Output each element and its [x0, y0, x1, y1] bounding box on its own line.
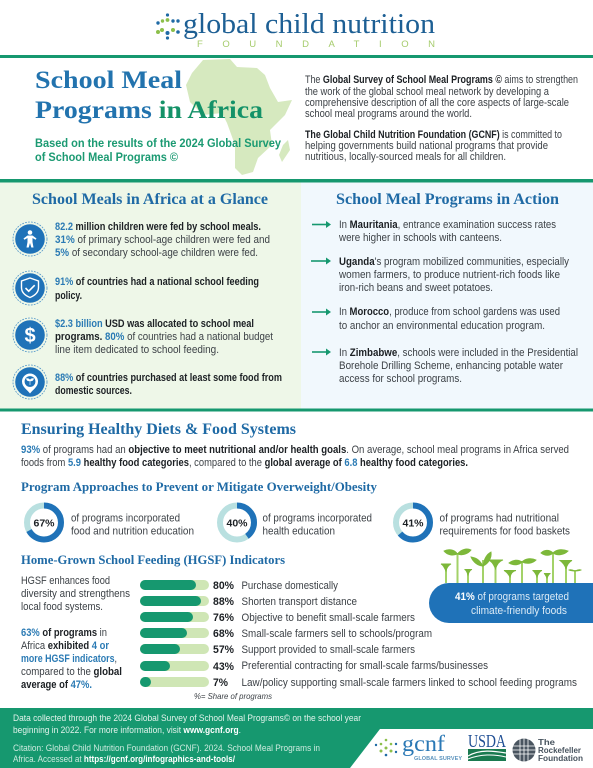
- text block: HGSF description: more HGSF indicators,: [21, 653, 117, 665]
- bar chart: 7%: [213, 677, 228, 689]
- text block: country examples: Borehole Drilling Scheme, enhancing potable water: [339, 360, 563, 372]
- donut label: [262, 512, 372, 538]
- donut: 41%: 41%: [402, 518, 424, 530]
- icon: shield: [13, 271, 47, 305]
- donut label: food and nutrition education: [71, 526, 194, 538]
- logo foundation: FOUNDATION: [197, 39, 435, 50]
- text block: key facts: 91% of countries had a national school feeding: [55, 276, 259, 288]
- text block: summary: foods from 5.9 healthy food categories, compared to the global average of 6.8 healthy food categories.: [21, 457, 468, 469]
- subtitle: of School Meal Programs ©: [35, 150, 178, 164]
- title: [35, 65, 263, 124]
- text block: HGSF description: [21, 575, 130, 691]
- footer text: [13, 713, 361, 764]
- logo wordmark: global child nutrition: [183, 9, 435, 40]
- text block: key facts: 82.2 million children were fed by school meals.: [55, 221, 261, 233]
- text block: country examples: Uganda's program mobilized communities, especially: [339, 256, 570, 268]
- donut label: of programs had nutritional: [440, 512, 559, 524]
- text block: country examples: to anchor an environmental education program.: [339, 320, 545, 332]
- bar chart: Law/policy supporting small-scale farmers linked to school feeding programs: [242, 677, 577, 689]
- text block: key facts: policy.: [55, 290, 82, 302]
- bar chart: Support provided to small-scale farmers: [242, 644, 415, 656]
- icon: dollar: $: [24, 325, 36, 347]
- chart note: %= Share of programs: [194, 691, 273, 701]
- icon: dollar: [13, 318, 47, 352]
- icon: Africa map: [186, 59, 292, 175]
- text block: HGSF description: compared to the global: [21, 666, 122, 678]
- logo: gcnf: gcnf: [402, 731, 445, 756]
- text block: summary: [21, 444, 569, 469]
- heading: Home-Grown School Feeding (HGSF) Indicators: [21, 553, 285, 567]
- logo: gcnf: [375, 731, 462, 762]
- text block: country examples: access for school programs.: [339, 373, 462, 385]
- donut: 40%: 40%: [226, 518, 248, 530]
- heading: Ensuring Healthy Diets & Food Systems: [21, 421, 296, 438]
- text block: key facts: domestic sources.: [55, 385, 132, 397]
- subheading: Program Approaches to Prevent or Mitigate Overweight/Obesity: [21, 480, 378, 494]
- title: Programs in Africa: [35, 95, 263, 124]
- icon: child: [13, 222, 47, 256]
- title: School Meal: [35, 65, 182, 94]
- text block: key facts: 5% of secondary school-age children were fed.: [55, 247, 258, 259]
- text block: key facts: 88% of countries purchased at least some food from: [55, 372, 282, 384]
- text block: country examples: iron-rich beans and sweet potatoes.: [339, 282, 493, 294]
- bar chart: Objective to benefit small-scale farmers: [242, 612, 415, 624]
- callout: climate-friendly foods: 41% of programs targeted: [455, 591, 569, 603]
- logo: USDA: USDA: [468, 731, 506, 751]
- logo panel: [350, 729, 593, 768]
- panel: intro: [35, 59, 578, 175]
- intro text: The Global Child Nutrition Foundation (GCNF) is committed to: [305, 129, 562, 141]
- text block: key facts: programs. 80% of countries had a national budget: [55, 331, 273, 343]
- bar chart: 88%: [213, 596, 234, 608]
- bar chart: Preferential contracting for small-scale farms/businesses: [242, 660, 488, 672]
- intro text: [305, 74, 578, 163]
- intro text: the work of the global school meal network by developing a: [305, 86, 549, 98]
- bar chart: Shorten transport distance: [242, 596, 357, 608]
- bar chart: 43%: [213, 661, 234, 673]
- panel: home-grown school feeding: [21, 549, 593, 701]
- donut label: requirements for food baskets: [440, 526, 570, 538]
- intro text: helping governments build national programs that provide: [305, 140, 548, 152]
- subtitle: Based on the results of the 2024 Global Survey: [35, 136, 281, 150]
- bar chart: Purchase domestically: [242, 580, 339, 592]
- callout: climate-friendly foods: climate-friendly foods: [471, 605, 567, 617]
- donut: 67%: 67%: [33, 518, 55, 530]
- text block: HGSF description: diversity and strengthens: [21, 588, 130, 600]
- heading: School Meals in Africa at a Glance: [32, 191, 268, 208]
- callout: climate-friendly foods: [429, 583, 593, 623]
- divider lines: [0, 55, 593, 182]
- bar chart: [140, 580, 577, 701]
- bar chart: 80%: [213, 580, 234, 592]
- logo: Rockefeller Foundation: The: [538, 738, 556, 747]
- footer text: Africa. Accessed at https://gcnf.org/infographics-and-tools/: [13, 754, 235, 764]
- panel: healthy diets and food systems: [21, 421, 570, 540]
- donut: 41%: [396, 506, 430, 540]
- subtitle: [35, 136, 281, 164]
- text block: country examples: In Zimbabwe, schools were included in the Presidential: [339, 347, 578, 359]
- header logo: [156, 9, 435, 50]
- logo: USDA: [468, 731, 506, 761]
- donut label: [71, 512, 194, 538]
- bar chart: 68%: [213, 628, 234, 640]
- donut: 40%: [220, 506, 254, 540]
- icon: food pin: [13, 365, 47, 399]
- donut label: health education: [262, 526, 335, 538]
- footer text: Data collected through the 2024 Global Survey of School Meal Programs© on the school year: [13, 713, 361, 723]
- text block: HGSF description: average of 47%.: [21, 679, 92, 691]
- bar chart: 57%: [213, 644, 234, 656]
- panel: school meal programs in action: [301, 182, 593, 408]
- text block: key facts: $2.3 billion USD was allocated to school meal: [55, 318, 254, 330]
- donut label: [440, 512, 570, 538]
- donut label: of programs incorporated: [71, 512, 180, 524]
- intro text: The Global Survey of School Meal Programs © aims to strengthen: [305, 74, 578, 86]
- text block: country examples: In Mauritania, entrance examination success rates: [339, 219, 556, 231]
- text block: key facts: line item dedicated to school feeding.: [55, 344, 219, 356]
- panel: school meals at a glance: [0, 182, 301, 408]
- icon: sprouts: [441, 549, 581, 583]
- intro text: school meal programs around the world.: [305, 108, 472, 120]
- logo: Rockefeller Foundation: [512, 738, 583, 763]
- intro text: nutritious, locally-sourced meals for all children.: [305, 151, 506, 163]
- text block: HGSF description: 63% of programs in: [21, 627, 107, 639]
- footer text: Citation: Global Child Nutrition Foundation (GCNF). 2024. School Meal Programs in: [13, 743, 320, 753]
- footer: [0, 708, 593, 768]
- bar chart: 76%: [213, 612, 234, 624]
- text block: country examples: In Morocco, produce from school gardens was used: [339, 306, 560, 318]
- icon: logo dots: [156, 13, 180, 40]
- text block: country examples: were higher in schools with canteens.: [338, 232, 502, 244]
- logo: gcnf: GLOBAL SURVEY: [414, 756, 462, 762]
- text block: HGSF description: local food systems.: [21, 601, 103, 613]
- text block: summary: 93% of programs had an objective to meet nutritional and/or health goals. On average, school meal programs in Africa served: [21, 444, 569, 456]
- footer text: beginning in 2022. For more information, visit www.gcnf.org.: [13, 725, 241, 735]
- donut label: of programs incorporated: [262, 512, 372, 524]
- donut: 67%: [27, 506, 61, 540]
- logo: Rockefeller Foundation: Rockefeller: [538, 746, 581, 755]
- text block: HGSF description: HGSF enhances food: [21, 575, 110, 587]
- bar chart: Small-scale farmers sell to schools/program: [242, 628, 432, 640]
- text block: country examples: women farmers, to produce nutrient-rich foods like: [338, 269, 560, 281]
- text block: key facts: 31% of primary school-age children were fed and: [55, 234, 270, 246]
- text block: HGSF description: Africa exhibited 4 or: [21, 640, 109, 652]
- logo: Rockefeller Foundation: Foundation: [538, 754, 583, 763]
- heading: School Meal Programs in Action: [336, 191, 559, 208]
- section divider: [0, 408, 593, 412]
- text block: country examples: [338, 219, 578, 385]
- text block: key facts: [55, 221, 282, 397]
- arrows: [311, 221, 331, 356]
